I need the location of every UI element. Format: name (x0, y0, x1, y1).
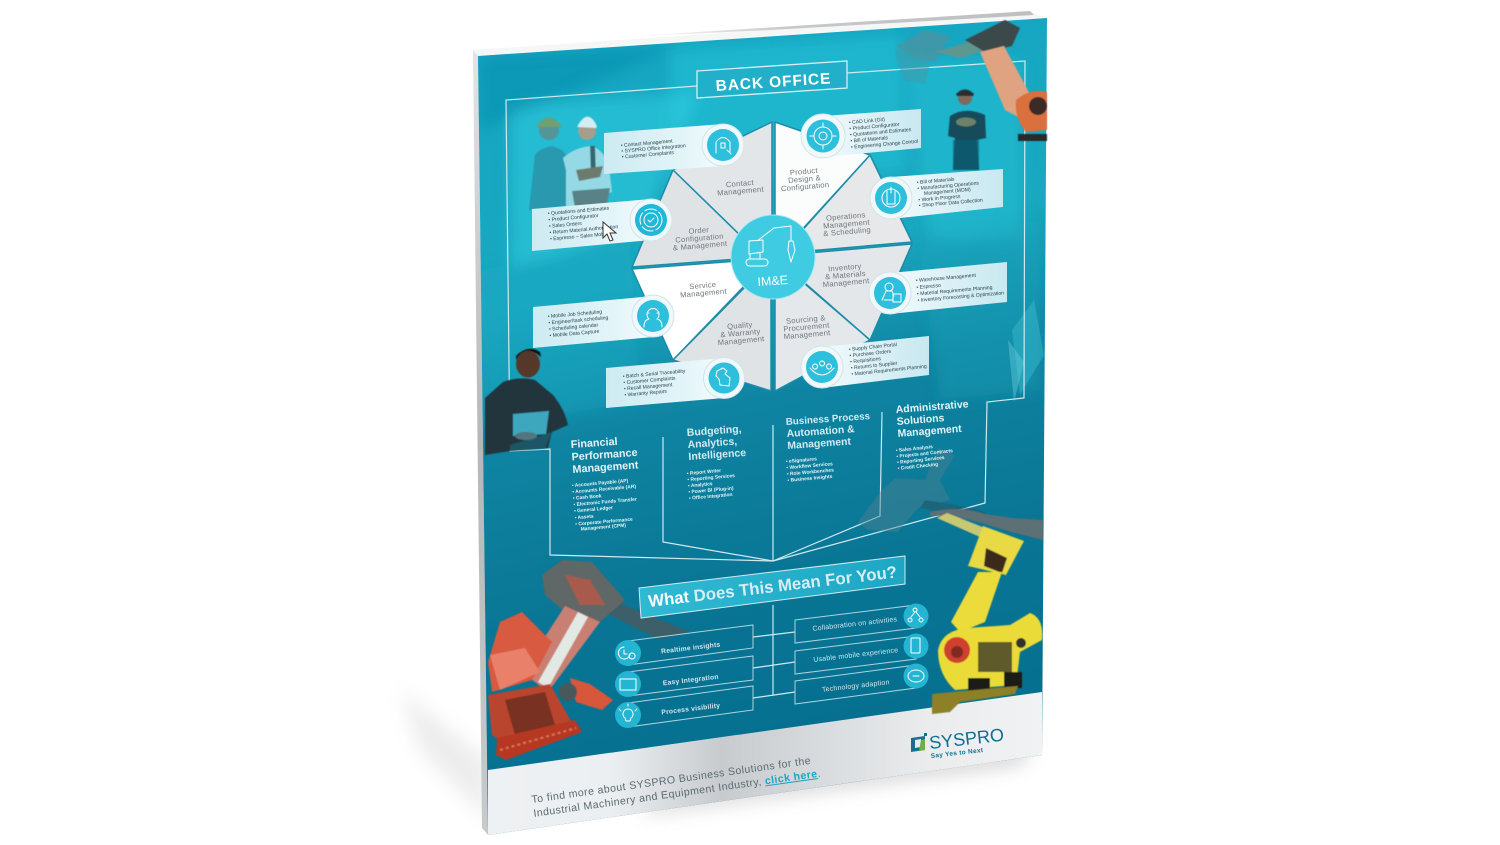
centre hub: IM&E (731, 215, 815, 299)
wheel labels: Quality (727, 320, 753, 331)
callout: inventory (869, 262, 1007, 314)
callout: product design: • CAD Link (Git) (849, 117, 885, 126)
benefit: technology adaption: Technology adaption (822, 679, 890, 694)
callout: product design: • Engineering Change Control (851, 139, 919, 151)
wheel labels (671, 165, 871, 347)
wheel labels: Management (717, 334, 765, 347)
wheel labels: Inventory (828, 262, 862, 273)
block: administrative solutions: Management (897, 423, 963, 440)
block: financial performance management: • Assets (574, 514, 594, 521)
callout: order configuration: • Espresso – Sales Mobile (550, 231, 610, 242)
callout: contact management (604, 124, 744, 174)
logo: syspro: Say Yes to Next (930, 747, 984, 760)
octagon wheel (632, 122, 912, 391)
photo: two workers (529, 117, 612, 210)
block: business process automation: • Role Workbenches (787, 467, 834, 478)
block: business process automation: Management (787, 436, 852, 452)
block: business process automation: • Business Insights (787, 474, 833, 484)
callout: contact management: • Contact Management (621, 138, 673, 149)
block: budgeting analytics intelligence: Intelligence (688, 447, 747, 463)
page background (478, 18, 1047, 835)
wheel segments (632, 122, 912, 391)
block: budgeting analytics intelligence: • Power BI (Plug-in) (688, 486, 734, 496)
ghost robot behind lists (858, 448, 985, 532)
callout: sourcing: • Purchase Orders (849, 349, 892, 359)
block: business process automation: • eSignatures (786, 456, 817, 465)
block: administrative solutions: • Credit Checking (897, 462, 938, 472)
callout: operations management: • Shop Floor Data Collection (919, 198, 983, 209)
benefit: collaboration on activities: Collaboration on activities (812, 616, 898, 633)
logo: syspro: SYSPRO (928, 725, 1005, 753)
benefit: easy integration: Easy Integration (663, 674, 719, 687)
wheel labels: Management (783, 328, 831, 341)
centre hub: IM&E: IM&E (757, 273, 788, 289)
callout: product design (801, 109, 921, 158)
block: financial performance management: • General Ledger (574, 505, 613, 514)
benefit: easy integration (615, 656, 753, 697)
callout: sourcing: • Supply Chain Portal (849, 342, 897, 353)
wheel labels: Management (717, 185, 765, 198)
callout: product design: • Product Configurator (849, 122, 900, 132)
wheel labels: Management (822, 276, 870, 289)
wheel labels: Configuration (781, 180, 830, 193)
block: administrative solutions (895, 398, 971, 472)
background light panels (478, 35, 1044, 430)
block: administrative solutions: • Sales Analysis (896, 444, 933, 454)
block: budgeting analytics intelligence: Budgeting, (686, 423, 742, 439)
wheel labels: & Management (673, 239, 728, 253)
wheel labels: Service (689, 280, 717, 291)
callout: inventory: • Warehouse Management (916, 273, 977, 284)
block: administrative solutions: • Projects and Contracts (896, 448, 953, 460)
callout: service management: • Mobile Job Scheduling (548, 309, 603, 320)
callout: operations management: Management (MOM) (924, 187, 971, 197)
banner: back office: BACK OFFICE (715, 70, 832, 95)
benefit: collaboration on activities (795, 604, 928, 643)
benefit: usable mobile experience: Usable mobile experience (813, 647, 899, 664)
block: budgeting analytics intelligence: • Report Writer (687, 468, 721, 477)
book shadow (400, 690, 1035, 820)
block: financial performance management: Performance (571, 447, 638, 463)
block: business process automation (785, 411, 873, 484)
callout: product design: • Quotations and Estimates (850, 127, 912, 138)
block: budgeting analytics intelligence: Analytics, (687, 436, 738, 451)
benefit: technology adaption (795, 664, 928, 704)
callout: order configuration: • Return Material Authorization (549, 224, 619, 236)
footer text: Industrial Machinery and Equipment Industry, click here. (533, 768, 822, 820)
footer band (488, 692, 1042, 835)
callout: service management: • Engineer/task scheduling (548, 315, 609, 326)
robot: red drill rig (488, 560, 690, 760)
callout: operations management: • Bill of Materials (917, 177, 955, 186)
block: financial performance management: • Accounts Payable (AP) (572, 478, 629, 489)
wheel labels: Product (789, 166, 819, 177)
wheel labels: Procurement (783, 321, 830, 334)
callout: quality: • Recall Management (624, 382, 673, 392)
callout: order configuration (532, 199, 672, 251)
block: financial performance management: • Corporate Performance (575, 517, 633, 528)
benefit: realtime insights (615, 625, 753, 666)
callout: order configuration: • Sales Orders (549, 221, 583, 230)
block: business process automation: Automation & (786, 424, 855, 440)
wheel labels: Design & (788, 173, 821, 185)
banner: what does this mean for you: What Does This Mean For You? (647, 562, 898, 611)
callout: operations management: • Manufacturing Operations (917, 181, 980, 192)
callout: service management: • Scheduling calendar (549, 322, 599, 333)
wheel labels: Management (680, 287, 728, 300)
robot arm: orange top right (895, 20, 1047, 141)
wheel labels: & Scheduling (823, 225, 871, 238)
callout: sourcing: • Returns to Supplier (851, 361, 898, 371)
callout: quality: • Batch & Serial Traceability (623, 369, 686, 380)
robot: yellow arm (930, 509, 1043, 714)
wheel labels: & Materials (825, 269, 866, 281)
block: budgeting analytics intelligence (686, 423, 747, 502)
logo: syspro (911, 725, 1005, 760)
callout: contact management: • Customer Complaints (622, 150, 675, 161)
wheel labels: Configuration (675, 231, 724, 245)
block: financial performance management: Management (572, 459, 639, 476)
block: administrative solutions: Solutions (896, 412, 945, 428)
callout: sourcing (801, 336, 929, 388)
block: financial performance management: • Cash Book (573, 493, 602, 502)
block: business process automation: • Workflow Services (786, 461, 833, 471)
block: financial performance management: Management (CPM) (580, 523, 627, 533)
block: financial performance management: • Accounts Receivable (AR) (572, 484, 637, 495)
wheel labels: Operations (826, 210, 866, 223)
callout: quality: • Customer Complaints (623, 376, 676, 386)
footer text: To find more about SYSPRO Business Solutions for the (531, 755, 812, 806)
callout: product design: • Bill of Materials (850, 135, 889, 145)
wheel labels: Contact (725, 178, 755, 189)
callout: sourcing: • Material Requirements Planning (851, 364, 927, 378)
benefit: process visibility (615, 686, 753, 728)
wheel labels: Order (688, 225, 710, 236)
book spine and top page edges (473, 11, 1047, 835)
benefit: process visibility: Process visibility (661, 703, 721, 716)
callout: operations management: • Work in Progress (918, 194, 961, 204)
frame lines (506, 61, 1025, 698)
benefit: realtime insights: Realtime insights (661, 642, 721, 656)
wheel labels: & Warranty (720, 327, 761, 339)
banner: back office (697, 61, 847, 98)
block: budgeting analytics intelligence: • Analytics (688, 481, 713, 489)
callout: inventory: • Material Requirements Planning (917, 285, 993, 297)
callout: service management: • Mobile Data Capture (549, 329, 600, 339)
block: administrative solutions: Administrative (895, 398, 969, 416)
block: budgeting analytics intelligence: • Reporting Services (687, 473, 735, 483)
callout: order configuration: • Product Configurator (548, 213, 599, 223)
block: financial performance management (570, 434, 640, 533)
cursor (603, 222, 616, 241)
wheel labels: Sourcing & (786, 313, 826, 326)
callout: sourcing: • Requisitions (850, 356, 882, 365)
benefit: usable mobile experience (795, 634, 928, 674)
callout: contact management: • SYSPRO Office Integration (621, 143, 686, 155)
callout: service management (533, 295, 674, 348)
callout: quality (606, 358, 744, 408)
callout: quality: • Warranty Repairs (624, 389, 668, 399)
block: financial performance management: • Electronic Funds Transfer (573, 497, 637, 508)
block: budgeting analytics intelligence: • Office Integration (689, 492, 733, 502)
callout: operations management (870, 169, 1003, 219)
wheel labels: Management (823, 218, 871, 231)
photo: man with tablet (485, 349, 568, 455)
callout: inventory: • Espresso (916, 283, 941, 291)
block: administrative solutions: • Reporting Services (897, 455, 945, 466)
photo: man with visor (948, 90, 986, 170)
block: business process automation: Business Process (785, 411, 871, 428)
callout: inventory: • Inventory Forecasting & Optimization (917, 290, 1004, 304)
callout: order configuration: • Quotations and Estimates (548, 206, 610, 217)
block: financial performance management: Financial (570, 436, 618, 451)
